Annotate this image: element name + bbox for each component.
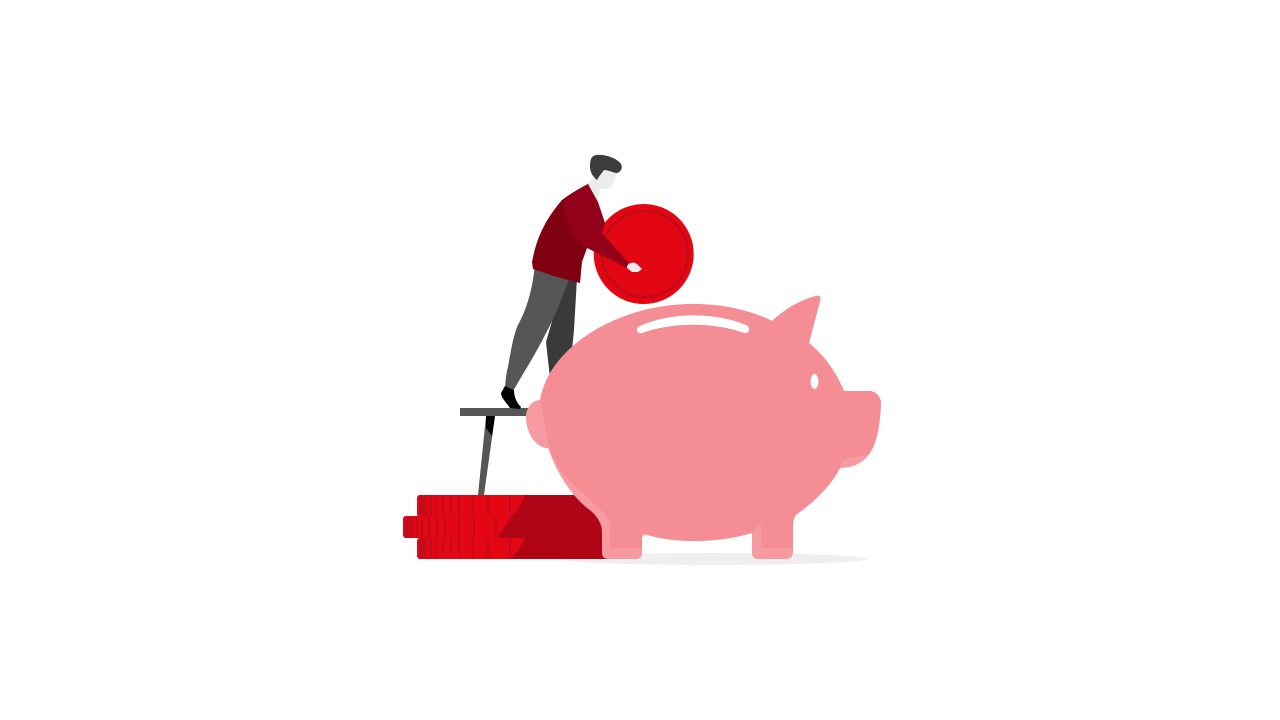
arm xyxy=(563,184,628,268)
coin slot xyxy=(637,315,749,333)
coin: middle xyxy=(403,516,607,538)
torso xyxy=(532,184,603,283)
back leg xyxy=(546,276,577,378)
front leg xyxy=(505,264,570,391)
shoe xyxy=(501,386,521,409)
table xyxy=(460,408,532,495)
coin rim xyxy=(594,204,694,304)
hair xyxy=(590,155,622,180)
coin: bottom xyxy=(417,538,607,559)
coin inner ring xyxy=(602,211,688,297)
coin edge ridges xyxy=(405,495,511,559)
coin stack shadow xyxy=(497,495,610,559)
pig body outline xyxy=(526,296,881,559)
coin: top xyxy=(417,495,607,517)
table leg xyxy=(478,416,495,495)
table top xyxy=(460,408,532,416)
piggy bank xyxy=(526,296,881,559)
hand xyxy=(627,263,642,272)
coin being held xyxy=(594,204,694,304)
neck and face xyxy=(588,168,617,202)
pig body fill xyxy=(540,296,881,548)
man xyxy=(501,155,694,409)
ground shadow xyxy=(561,553,867,565)
table leg shadow xyxy=(486,416,495,436)
coin stacks xyxy=(403,495,610,559)
pig eye xyxy=(810,374,818,389)
